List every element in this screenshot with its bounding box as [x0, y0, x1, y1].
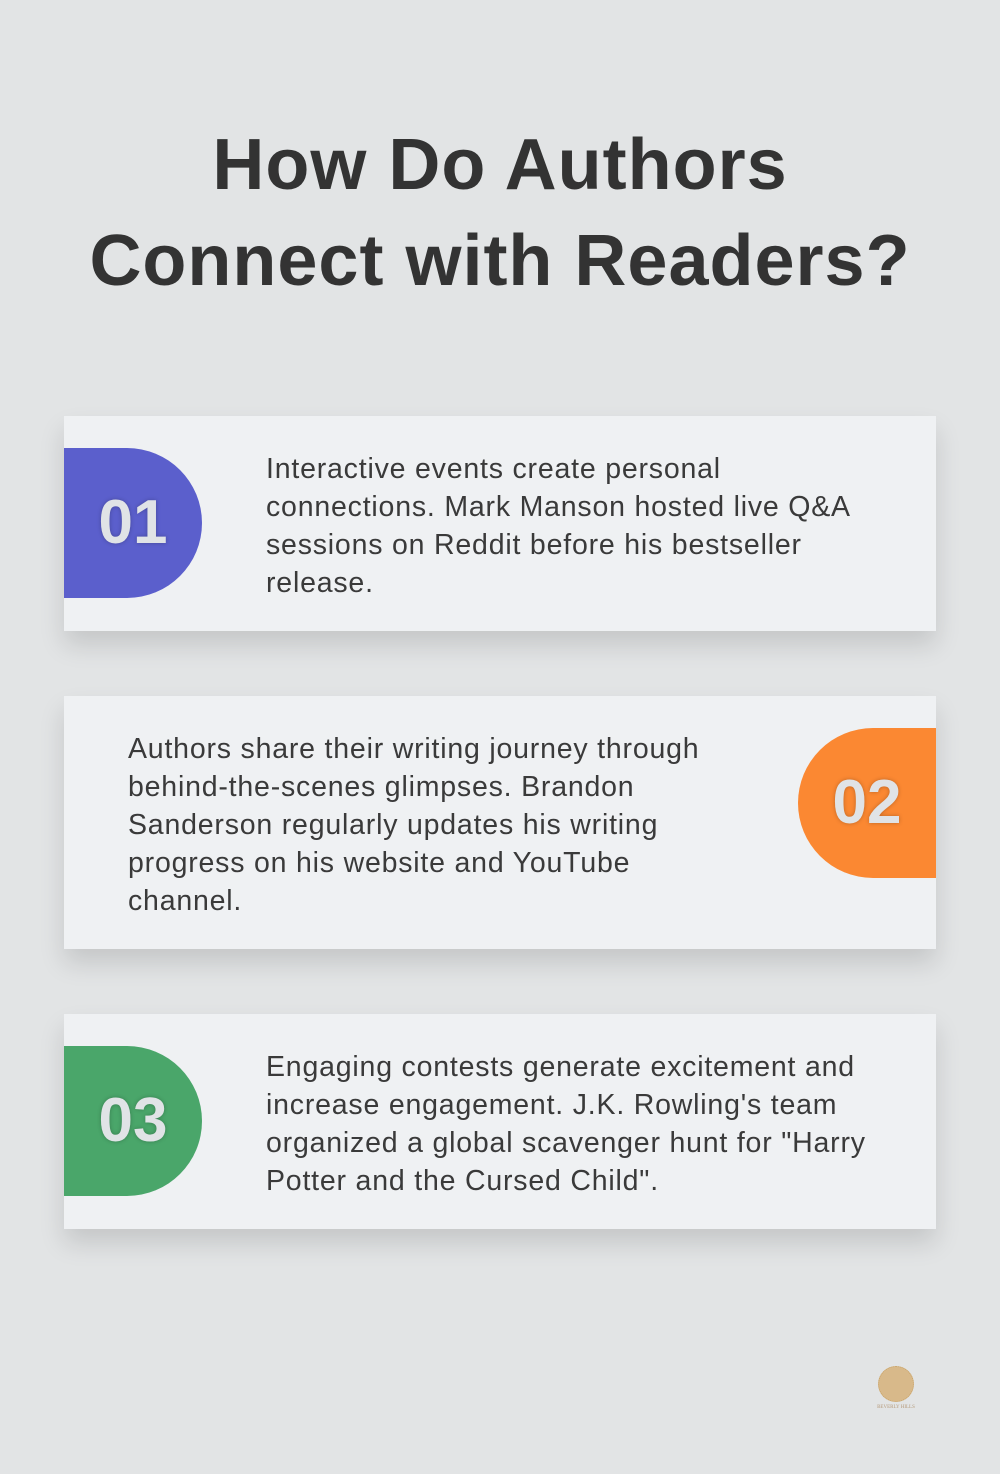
badge 02 [798, 728, 936, 878]
text 3 [266, 1051, 866, 1197]
text 2: progress on his website and YouTube [128, 847, 630, 879]
logo: BEVERLY HILLS [877, 1405, 915, 1410]
panel: card 2 [64, 696, 936, 949]
badge 03 [64, 1046, 202, 1196]
logo [877, 1366, 915, 1410]
text 3: Engaging contests generate excitement and [266, 1051, 855, 1083]
title [89, 125, 911, 301]
text 3: Potter and the Cursed Child". [266, 1165, 659, 1197]
text 3: organized a global scavenger hunt for "Harry [266, 1127, 866, 1159]
text 3: increase engagement. J.K. Rowling's team [266, 1089, 837, 1121]
title: Connect with Readers? [89, 221, 911, 301]
text 2: Sanderson regularly updates his writing [128, 809, 658, 841]
text 2 [128, 733, 699, 917]
badge 03: 03 [99, 1086, 167, 1155]
text 1: connections. Mark Manson hosted live Q&A [266, 491, 851, 523]
title: How Do Authors [212, 125, 788, 205]
text 2: Authors share their writing journey through [128, 733, 699, 765]
badge 01 [64, 448, 202, 598]
badge 01: 01 [99, 488, 167, 557]
text 1: sessions on Reddit before his bestseller [266, 529, 802, 561]
panel: card 1 [64, 416, 936, 631]
badge 02: 02 [833, 768, 901, 837]
text 1: Interactive events create personal [266, 453, 721, 485]
text 2: channel. [128, 885, 242, 917]
text 1: release. [266, 567, 374, 599]
text 2: behind-the-scenes glimpses. Brandon [128, 771, 634, 803]
text 1 [266, 453, 851, 599]
panel: card 3 [64, 1014, 936, 1229]
